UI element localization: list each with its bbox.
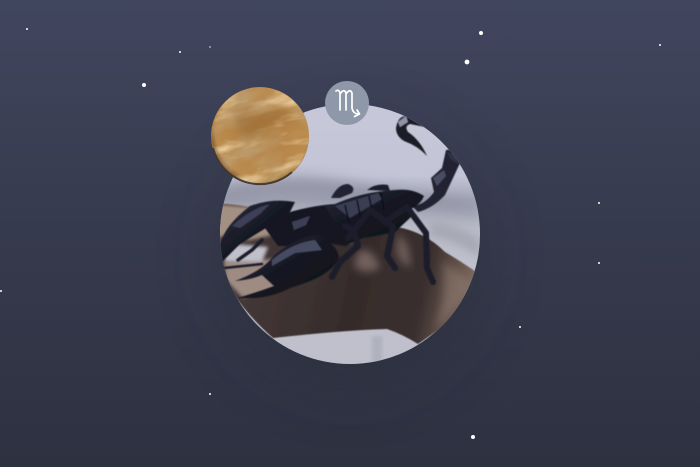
head xyxy=(264,206,328,246)
upper claw xyxy=(220,201,295,262)
photo: scorpion on a hand xyxy=(215,100,485,370)
badge: Scorpio symbol xyxy=(325,81,369,125)
pale backdrop xyxy=(215,100,485,370)
body xyxy=(290,190,424,246)
rear bumps xyxy=(331,184,353,198)
photo shadow xyxy=(220,125,480,385)
stinger xyxy=(396,116,427,156)
icon: Scorpio glyph xyxy=(336,90,360,116)
lower claw xyxy=(235,235,339,298)
scorpion xyxy=(220,116,460,298)
hand and forearm xyxy=(215,203,482,344)
planet: Venus xyxy=(211,87,309,186)
legs xyxy=(224,207,433,282)
tail xyxy=(412,149,460,212)
